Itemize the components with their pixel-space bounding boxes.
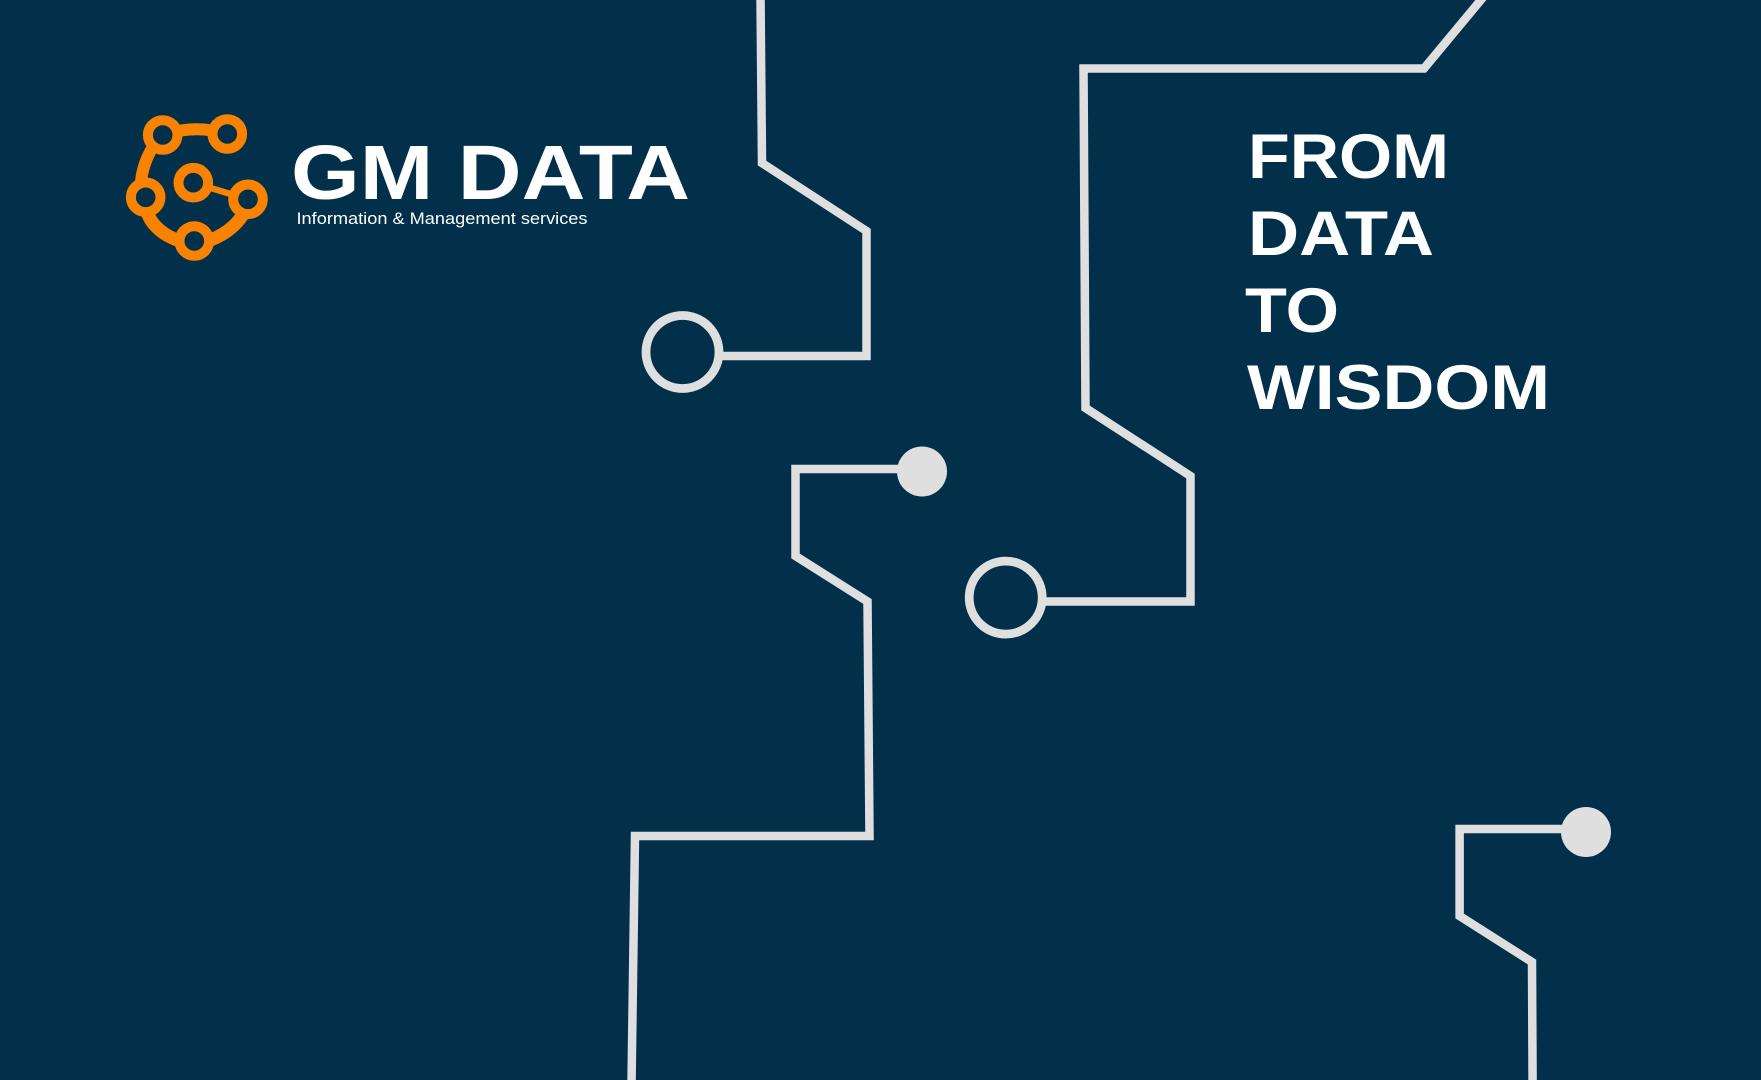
headline line 4: WISDOM <box>1247 353 1550 423</box>
circuit trace 1 with open ring terminal <box>646 0 866 388</box>
headline line 3: TO <box>1245 276 1339 346</box>
circuit trace 4 with solid dot terminal <box>1460 807 1611 1080</box>
brand tagline: Information & Management services <box>296 210 588 228</box>
circuit trace 3 with solid dot terminal <box>632 446 947 1080</box>
logo nodes <box>131 119 263 256</box>
logo connecting arcs <box>140 129 248 245</box>
headline line 1: FROM <box>1248 122 1449 192</box>
brand name: GM DATA <box>291 130 690 216</box>
headline line 2: DATA <box>1248 199 1434 269</box>
logo: orange network G icon <box>131 119 263 256</box>
headline: from data to wisdom <box>1245 122 1550 423</box>
circuit trace 2 with open ring terminal <box>969 0 1485 634</box>
